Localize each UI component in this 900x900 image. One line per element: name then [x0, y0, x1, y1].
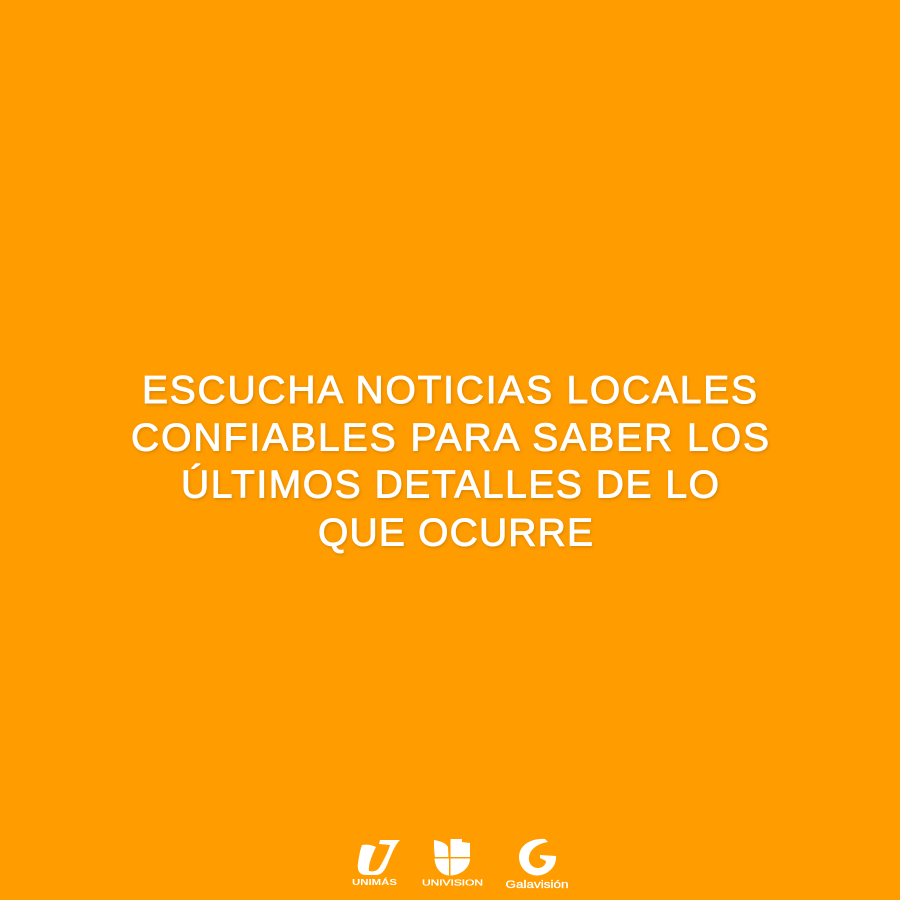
- headline: ÚLTIMOS DETALLES DE LO: [181, 464, 719, 506]
- headline: QUE OCURRE: [318, 512, 593, 554]
- logos row: [352, 839, 568, 891]
- icon: Galavisión G: [519, 839, 556, 876]
- icon: UniMás U: [358, 840, 400, 875]
- headline: CONFIABLES PARA SABER LOS: [131, 416, 769, 460]
- logo: Univision: [422, 839, 483, 888]
- icon: Univision tulip: [434, 839, 470, 876]
- wordmark: UniMás: UNIMÁS: [352, 878, 398, 887]
- logo: UniMás: [352, 840, 400, 887]
- headline: ESCUCHA NOTICIAS LOCALES: [142, 369, 757, 412]
- headline: [131, 369, 769, 554]
- wordmark: Galavisión: Galavisión: [506, 879, 568, 891]
- logo: Galavisión: [506, 839, 568, 891]
- wordmark: Univision: UNIVISION: [422, 878, 483, 888]
